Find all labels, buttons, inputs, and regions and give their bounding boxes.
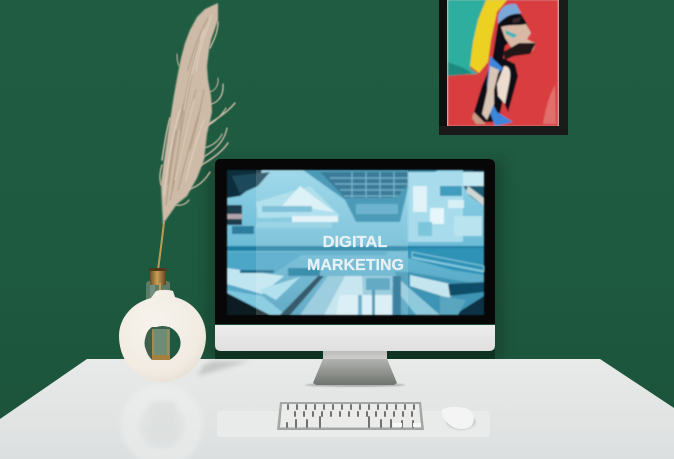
monitor shadow on desk xyxy=(305,383,405,387)
glass bottle xyxy=(146,268,170,361)
left sky pyramid xyxy=(256,186,340,218)
pampas grass stem xyxy=(158,222,164,270)
sky patches on the right xyxy=(408,172,463,242)
screen title xyxy=(307,234,404,274)
keyboard xyxy=(277,402,424,430)
monitor stand xyxy=(215,350,495,385)
vase shadow on desk xyxy=(198,361,250,376)
pampas grass plume xyxy=(160,3,235,224)
monitor xyxy=(215,159,495,385)
monitor chin xyxy=(215,325,495,351)
upper dark building xyxy=(303,170,438,222)
translucent centre panel xyxy=(256,170,408,315)
screen title: DIGITAL xyxy=(322,234,388,251)
lower right building xyxy=(408,248,484,275)
mouse xyxy=(442,407,476,430)
screen title: MARKETING xyxy=(307,257,404,274)
monitor bezel xyxy=(215,159,495,324)
painting: framed portrait xyxy=(439,0,568,135)
screen xyxy=(227,170,484,315)
monitor reflection on desk xyxy=(217,411,490,437)
monitor wall shadow xyxy=(205,160,505,360)
desk surface xyxy=(0,359,674,459)
lower left xyxy=(227,252,306,286)
white donut vase xyxy=(119,290,206,382)
vase reflection on desk xyxy=(130,393,194,457)
central road xyxy=(300,276,392,315)
horizon xyxy=(227,246,484,251)
